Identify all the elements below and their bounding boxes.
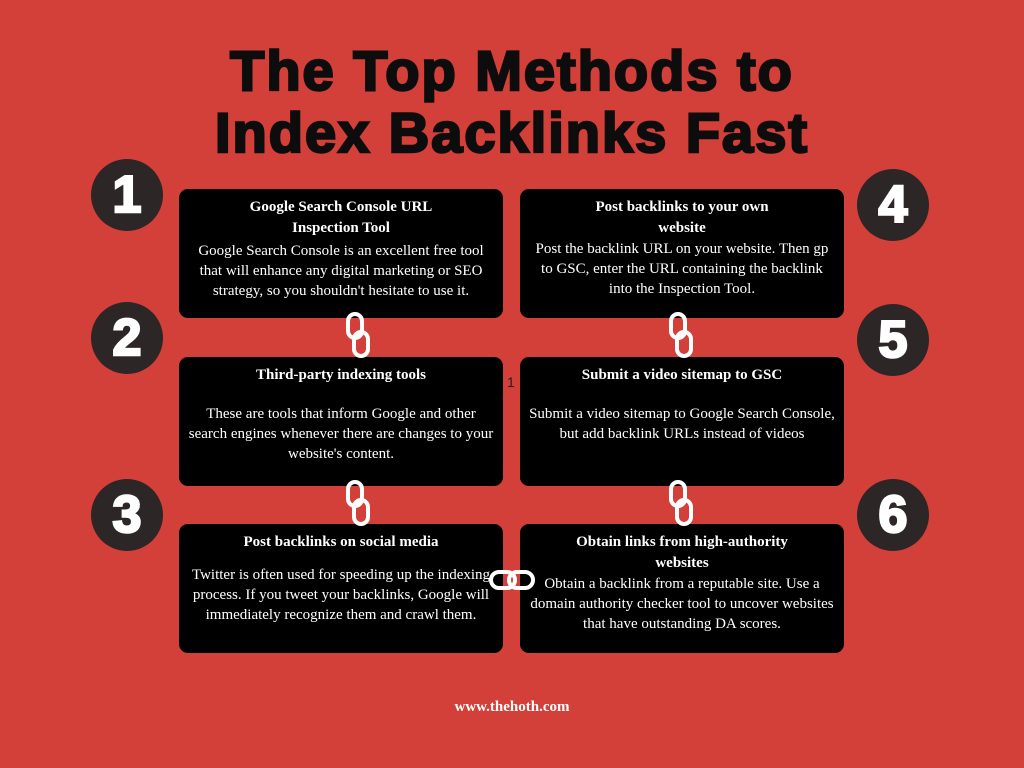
panel 6: Obtain links from high-authority	[576, 534, 788, 550]
panel 2: These are tools that inform Google and other search engines whenever there are changes to your website's content.	[189, 406, 493, 462]
number 6: 6	[879, 486, 907, 544]
panel 1: Google Search Console URL	[250, 199, 432, 215]
panel 5	[520, 357, 844, 486]
number 1: 1	[113, 166, 141, 224]
number 2	[91, 302, 163, 374]
number 2: 2	[113, 309, 141, 367]
panel 4: Post the backlink URL on your website. Then gp to GSC, enter the URL containing the backlink into the Inspection Tool.	[536, 241, 828, 297]
chain 2	[346, 480, 370, 526]
panel 3: Post backlinks on social media	[243, 534, 439, 550]
number 6	[857, 479, 929, 551]
number 4: 4	[879, 176, 907, 234]
panel 6	[520, 524, 844, 653]
footer url: www.thehoth.com	[454, 699, 570, 715]
panel 3: Twitter is often used for speeding up the indexing process. If you tweet your backlinks, Google will immediately recognize them and crawl them.	[192, 567, 490, 623]
panel 6: Obtain a backlink from a reputable site. Use a domain authority checker tool to uncover websites that have outstanding DA scores.	[530, 576, 834, 632]
title: Index Backlinks Fast	[215, 101, 809, 164]
panel 4: website	[658, 220, 706, 236]
number 3	[91, 479, 163, 551]
panel 2: Third-party indexing tools	[256, 367, 426, 383]
panel 5: Submit a video sitemap to Google Search Console, but add backlink URLs instead of videos	[529, 406, 835, 442]
title: The Top Methods to	[230, 39, 794, 102]
panel 1: Google Search Console is an excellent free tool that will enhance any digital marketing or SEO strategy, so you shouldn't hesitate to use it.	[198, 243, 484, 299]
chain 1	[346, 312, 370, 358]
chain 5	[669, 480, 693, 526]
panel 5: Submit a video sitemap to GSC	[582, 367, 782, 383]
number 1	[91, 159, 163, 231]
panel 1	[179, 189, 503, 318]
number 4	[857, 169, 929, 241]
panel 2	[179, 357, 503, 486]
chain 4	[669, 312, 693, 358]
panel 1: Inspection Tool	[292, 220, 390, 236]
panel 4	[520, 189, 844, 318]
number 5: 5	[879, 311, 907, 369]
number 3: 3	[113, 486, 141, 544]
panel 4: Post backlinks to your own	[595, 199, 769, 215]
panel 6: websites	[655, 555, 709, 571]
stray digit: 1	[507, 374, 515, 390]
number 5	[857, 304, 929, 376]
title	[215, 39, 809, 164]
panel 3	[179, 524, 503, 653]
chain horizontal	[489, 570, 535, 590]
